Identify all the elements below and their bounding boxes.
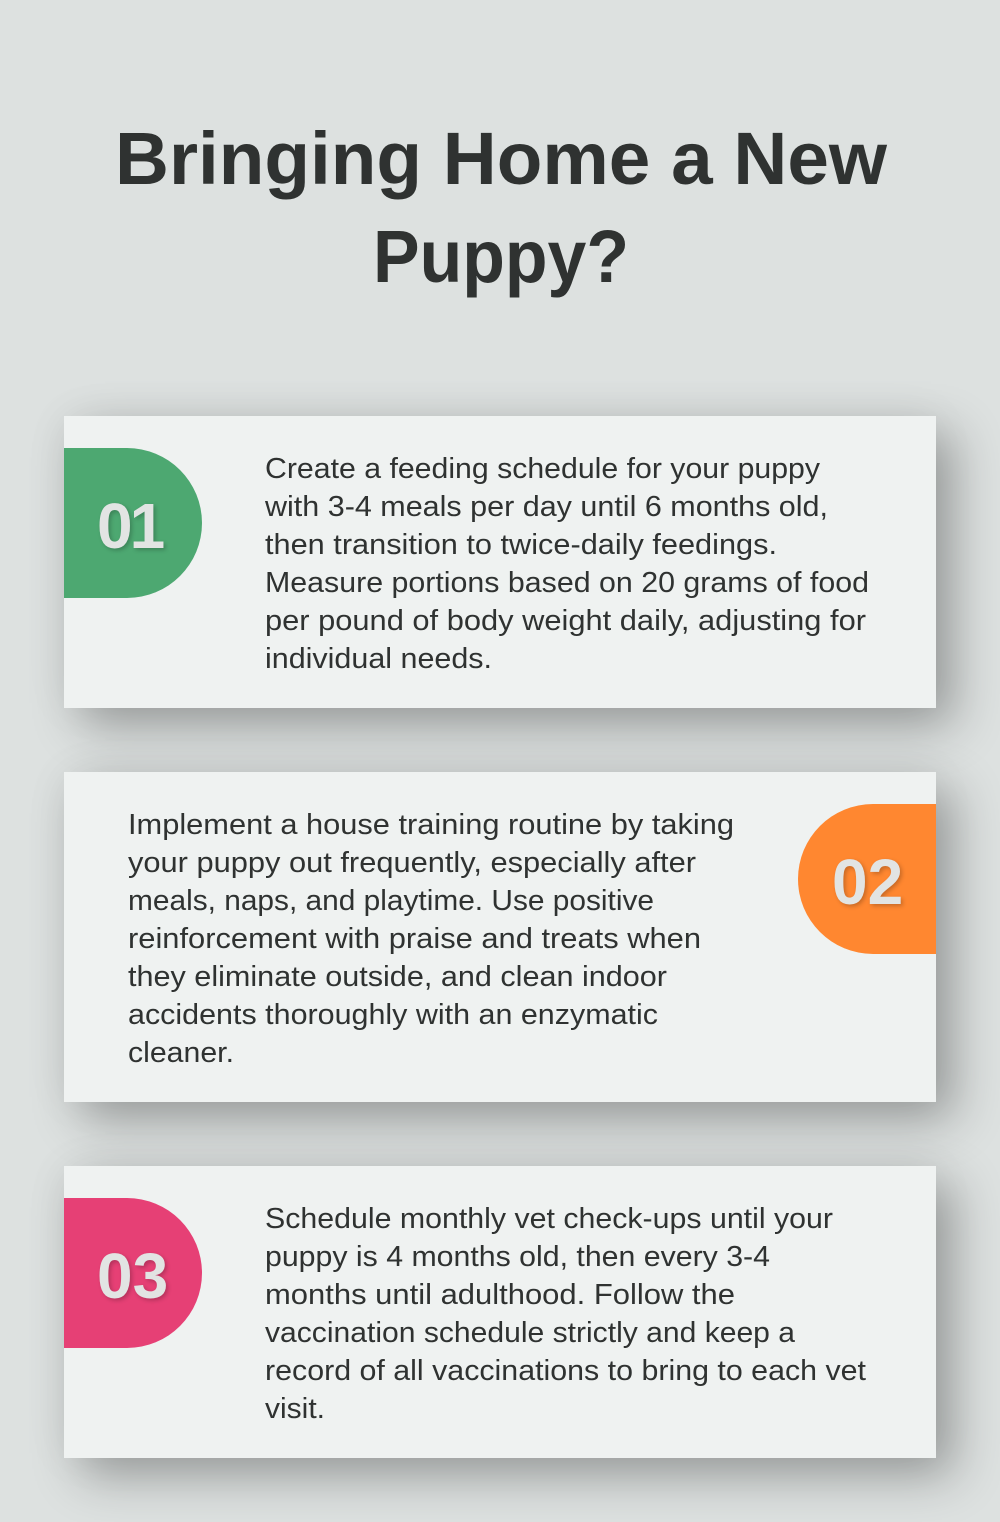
text: vet check-ups: months until adulthood. Follow the	[265, 1279, 735, 1311]
panel: step 2 house training	[64, 772, 936, 1102]
text: feeding schedule: with 3-4 meals per day until 6 months old,	[264, 491, 828, 523]
text: house training: your puppy out frequently, especially after	[128, 847, 696, 879]
text: vet check-ups	[265, 1203, 866, 1425]
title	[115, 117, 888, 298]
text: vet check-ups: visit.	[265, 1393, 325, 1425]
text: vet check-ups: Schedule monthly vet check-ups until your	[265, 1203, 833, 1235]
number 03: 03	[97, 1240, 168, 1312]
number 02: 02	[832, 846, 903, 918]
text: vet check-ups: puppy is 4 months old, then every 3-4	[265, 1241, 770, 1273]
title: Bringing Home a New	[115, 117, 887, 200]
text: feeding schedule: individual needs.	[265, 643, 492, 675]
badge: 03	[64, 1198, 202, 1348]
text: feeding schedule: Measure portions based on 20 grams of food	[265, 567, 869, 599]
text: house training: meals, naps, and playtime. Use positive	[128, 885, 654, 917]
panel: step 1 feeding schedule	[64, 416, 936, 708]
text: feeding schedule	[264, 453, 869, 675]
text: feeding schedule: per pound of body weight daily, adjusting for	[265, 605, 866, 637]
title: Puppy?	[373, 215, 629, 298]
number 01: 01	[97, 490, 162, 562]
text: house training: Implement a house training routine by taking	[128, 809, 734, 841]
text: vet check-ups: record of all vaccinations to bring to each vet	[265, 1355, 866, 1387]
text: house training: reinforcement with praise and treats when	[128, 923, 701, 955]
text: house training: cleaner.	[128, 1037, 234, 1069]
text: house training: accidents thoroughly with an enzymatic	[128, 999, 658, 1031]
text: vet check-ups: vaccination schedule strictly and keep a	[265, 1317, 796, 1349]
badge: 02	[798, 804, 936, 954]
badge: 01	[64, 448, 202, 598]
text: house training	[128, 809, 734, 1069]
text: house training: they eliminate outside, and clean indoor	[128, 961, 667, 993]
panel: step 3 vet check-ups	[64, 1166, 936, 1458]
text: feeding schedule: then transition to twice-daily feedings.	[265, 529, 777, 561]
text: feeding schedule: Create a feeding schedule for your puppy	[265, 453, 821, 485]
